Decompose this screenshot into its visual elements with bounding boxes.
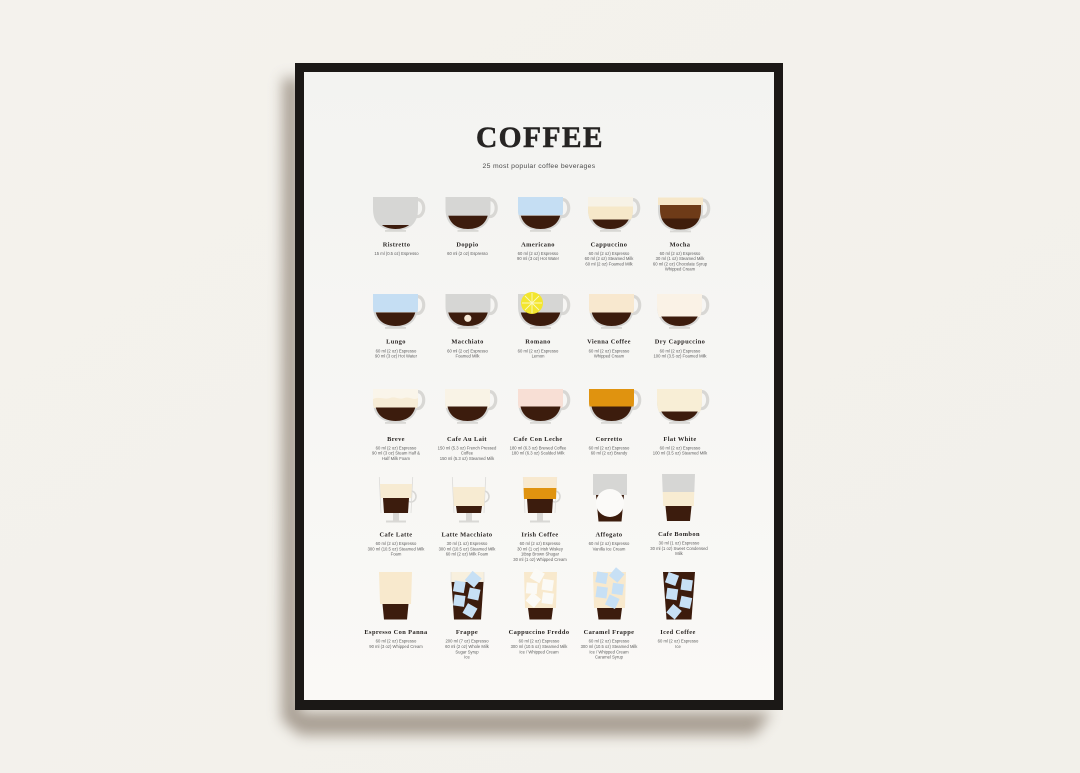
name: Cafe Bombon: Cafe Bombon [658,531,700,538]
icon: cappuccino freddo glass with ice [524,568,557,620]
recipe: Caramel Frappe: Caramel Syrup [595,655,624,660]
subtitle: 25 most popular coffee beverages [483,163,596,170]
name: Cafe Con Leche: Cafe Con Leche [513,436,563,443]
drink: Espresso Con Panna [364,572,428,649]
recipe: Lungo: 60 ml (2 oz) Espresso [376,348,416,353]
recipe: Lungo: 90 ml (3 oz) Hot Water [375,354,418,358]
name: Breve: Breve [387,436,405,443]
drink: Latte Macchiato [439,477,496,557]
recipe: Mocha: 30 ml (1 oz) Steamed Milk [656,256,705,261]
icon: latte macchiato glass [452,477,489,522]
recipe: Frappe: Ice [464,655,470,660]
icon: lemon slice [521,292,543,314]
icon: ristretto cup [373,197,424,232]
icon: cafe latte glass [379,477,416,522]
drink: Frappe [445,571,490,660]
recipe: Cappuccino Freddo: 300 ml (10.5 oz) Steamed Milk [511,644,568,649]
drink: Vienna Coffee [587,294,640,358]
recipe: Ristretto: 15 ml (0.5 oz) Espresso [374,251,419,256]
recipe: Macchiato: Foamed Milk [456,354,480,358]
icon: espresso con panna glass [379,572,412,620]
name: Cafe Latte: Cafe Latte [380,532,412,538]
drink: Doppio [446,197,496,256]
recipe: Vienna Coffee: Whipped Cream [594,354,625,358]
recipe: Dry Cappuccino: 100 ml (3.5 oz) Foamed Milk [653,354,707,358]
name: Cafe Au Lait: Cafe Au Lait [447,436,487,443]
recipe: Flat White: 100 ml (3.5 oz) Steamed Milk [653,451,708,456]
recipe: Mocha: 60 ml (2 oz) Chocolate Syrup [653,261,708,266]
icon: flat white cup [657,389,708,424]
name: Americano: Americano [521,242,555,248]
name: Lungo: Lungo [386,338,406,346]
icon: doppio cup [446,197,496,232]
recipe: Irish Coffee: 60 ml (2 oz) Espresso [520,541,560,546]
name: Caramel Frappe: Caramel Frappe [584,629,634,636]
drink: Corretto [589,389,640,456]
name: Cappuccino: Cappuccino [591,242,627,248]
recipe: Americano: 60 ml (2 oz) Espresso [518,251,558,256]
drink: Irish Coffee [513,477,567,562]
drink: Cafe Au Lait [438,389,497,461]
recipe: Irish Coffee: 1tbsp Brown Shugar [521,552,560,557]
name: Macchiato: Macchiato [451,338,484,346]
icon: vienna cup [589,294,640,329]
recipe: Cafe Au Lait: 150 ml (5.3 oz) Steamed Milk [440,456,495,461]
recipe: Affogato: Vanilla Ice Cream [593,546,626,551]
recipe: Cafe Con Leche: 180 ml (6.3 oz) Scalded Milk [512,451,565,456]
black frame [295,63,783,710]
icon: lungo cup [373,294,424,329]
recipe: Cappuccino: 60 ml (2 oz) Foamed Milk [585,261,634,266]
recipe: Cappuccino Freddo: Ice / Whipped Cream [519,649,559,654]
icon: frappe glass with ice [451,571,484,620]
recipe: Cafe Bombon: 30 ml (1 oz) Espresso [659,540,699,546]
recipe: Breve: Half Milk Foam [382,456,410,461]
recipe: Cafe Latte: 60 ml (2 oz) Espresso [376,541,416,546]
recipe: Romano: 60 ml (2 oz) Espresso [518,348,558,353]
drink: Americano [517,197,569,261]
drink: Ristretto [373,197,424,256]
recipe: Flat White: 60 ml (2 oz) Espresso [660,446,700,450]
recipe: Espresso Con Panna: 60 ml (2 oz) Espresso [376,638,416,644]
icon: cafe bombon glass [662,474,695,521]
name: Dry Cappuccino: Dry Cappuccino [655,338,705,346]
icon: irish coffee glass [523,477,560,522]
icon: caramel frappe glass with ice [593,567,626,620]
name: Corretto: Corretto [596,436,622,443]
recipe: Irish Coffee: 30 ml (1 oz) Whipped Cream [513,557,567,562]
icon: corretto cup [589,389,640,424]
icon: americano cup [518,197,569,232]
recipe: Latte Macchiato: 60 ml (2 oz) Milk Foam [446,552,489,557]
recipe: Macchiato: 60 ml (2 oz) Espresso [447,348,488,353]
recipe: Cappuccino: 60 ml (2 oz) Steamed Milk [585,256,634,261]
name: Irish Coffee: Irish Coffee [521,532,559,538]
recipe: Latte Macchiato: 300 ml (10.5 oz) Steamed Milk [439,546,496,551]
name: Iced Coffee: Iced Coffee [660,629,696,636]
name: Cappuccino Freddo: Cappuccino Freddo [509,629,569,636]
recipe: Espresso Con Panna: 90 ml (3 oz) Whipped Cream [369,644,423,649]
recipe: Cafe Bombon: 30 ml (1 oz) Sweet Condensed [650,546,708,551]
recipe: Caramel Frappe: 300 ml (10.5 oz) Steamed Milk [581,644,638,649]
name: Ristretto: Ristretto [383,242,410,248]
name: Mocha: Mocha [670,242,691,248]
recipe: Caramel Frappe: 60 ml (2 oz) Espresso [589,638,629,644]
recipe: Frappe: 200 ml (7 oz) Espresso [445,638,489,644]
name: Flat White: Flat White [663,436,697,443]
recipe: Iced Coffee: Ice [675,644,681,649]
recipe: Corretto: 60 ml (2 oz) Brandy [591,451,628,456]
icon: dry cappuccino cup [657,294,708,329]
icon: ice cream scoop [596,489,624,517]
drink: Caramel Frappe [581,567,638,660]
drink: Lungo [373,294,424,358]
name: Latte Macchiato: Latte Macchiato [442,532,492,538]
recipe: Romano: Lemon [532,354,545,358]
drink: Iced Coffee [658,572,699,649]
icon: affogato glass [593,474,627,522]
icon: cappuccino cup [588,197,639,232]
recipe: Cafe Au Lait: Coffee [461,451,474,456]
poster paper [304,72,774,700]
name: Frappe: Frappe [456,629,478,636]
name: Affogato: Affogato [596,532,622,538]
drink: Romano [518,292,569,358]
drink: Mocha [653,198,709,272]
drink: Macchiato [446,294,496,358]
name: Espresso Con Panna: Espresso Con Panna [364,629,428,636]
recipe: Frappe: 60 ml (2 oz) Whole Milk [445,644,490,649]
recipe: Cappuccino: 60 ml (2 oz) Espresso [589,251,629,256]
recipe: Cafe Au Lait: 150 ml (5.3 oz) French Pressed [438,446,496,450]
recipe: Breve: 60 ml (2 oz) Espresso [376,446,416,450]
recipe: Americano: 90 ml (3 oz) Hot Water [517,256,560,261]
recipe: Frappe: Sugar Syrup [455,649,479,654]
icon: cafe au lait cup [445,389,496,424]
name: Vienna Coffee: Vienna Coffee [587,338,631,346]
recipe: Breve: 90 ml (3 oz) Steam Half & [372,451,420,456]
drink: Cafe Bombon [650,474,708,556]
drink: Dry Cappuccino [653,294,708,358]
drink: Cappuccino Freddo [509,568,569,654]
icon: romano cup with lemon [518,292,569,329]
frame shadow [282,78,772,735]
recipe: Vienna Coffee: 60 ml (2 oz) Espresso [589,348,629,353]
recipe: Iced Coffee: 60 ml (2 oz) Espresso [658,638,698,644]
recipe: Dry Cappuccino: 60 ml (2 oz) Espresso [660,348,700,353]
drink: Breve [372,389,424,461]
drink: Cappuccino [585,197,639,266]
recipe: Affogato: 60 ml (2 oz) Espresso [589,541,629,546]
recipe: Corretto: 60 ml (2 oz) Espresso [589,446,629,450]
drink: Cafe Con Leche [510,389,569,456]
recipe: Cafe Bombon: Milk [675,551,684,556]
recipe: Cafe Latte: 300 ml (10.5 oz) Steamed Milk [368,546,425,551]
icon: mocha cup [658,198,709,232]
name: Romano: Romano [525,338,551,346]
icon: macchiato cup [446,294,496,329]
icon: iced coffee glass with ice [663,572,695,620]
icon: cafe con leche cup [518,389,569,424]
recipe: Cafe Con Leche: 180 ml (6.3 oz) Brewed Coffee [510,446,566,450]
recipe: Caramel Frappe: Ice / Whipped Cream [589,649,629,654]
title: COFFEE [476,122,604,154]
icon: breve cup [373,389,424,424]
recipe: Cafe Latte: Foam [391,552,402,557]
recipe: Mocha: 60 ml (2 oz) Espresso [660,251,700,256]
recipe: Irish Coffee: 30 ml (1 oz) Irish Wiskey [517,546,564,551]
recipe: Cappuccino Freddo: 60 ml (2 oz) Espresso [519,638,559,644]
drink: Flat White [653,389,708,456]
drink: Affogato [589,474,630,551]
name: Doppio: Doppio [456,242,479,248]
recipe: Doppio: 60 ml (2 oz) Espresso [447,251,489,256]
recipe: Mocha: Whipped Cream [665,267,696,272]
drink: Cafe Latte [368,477,425,557]
recipe: Latte Macchiato: 30 ml (1 oz) Espresso [447,541,487,546]
